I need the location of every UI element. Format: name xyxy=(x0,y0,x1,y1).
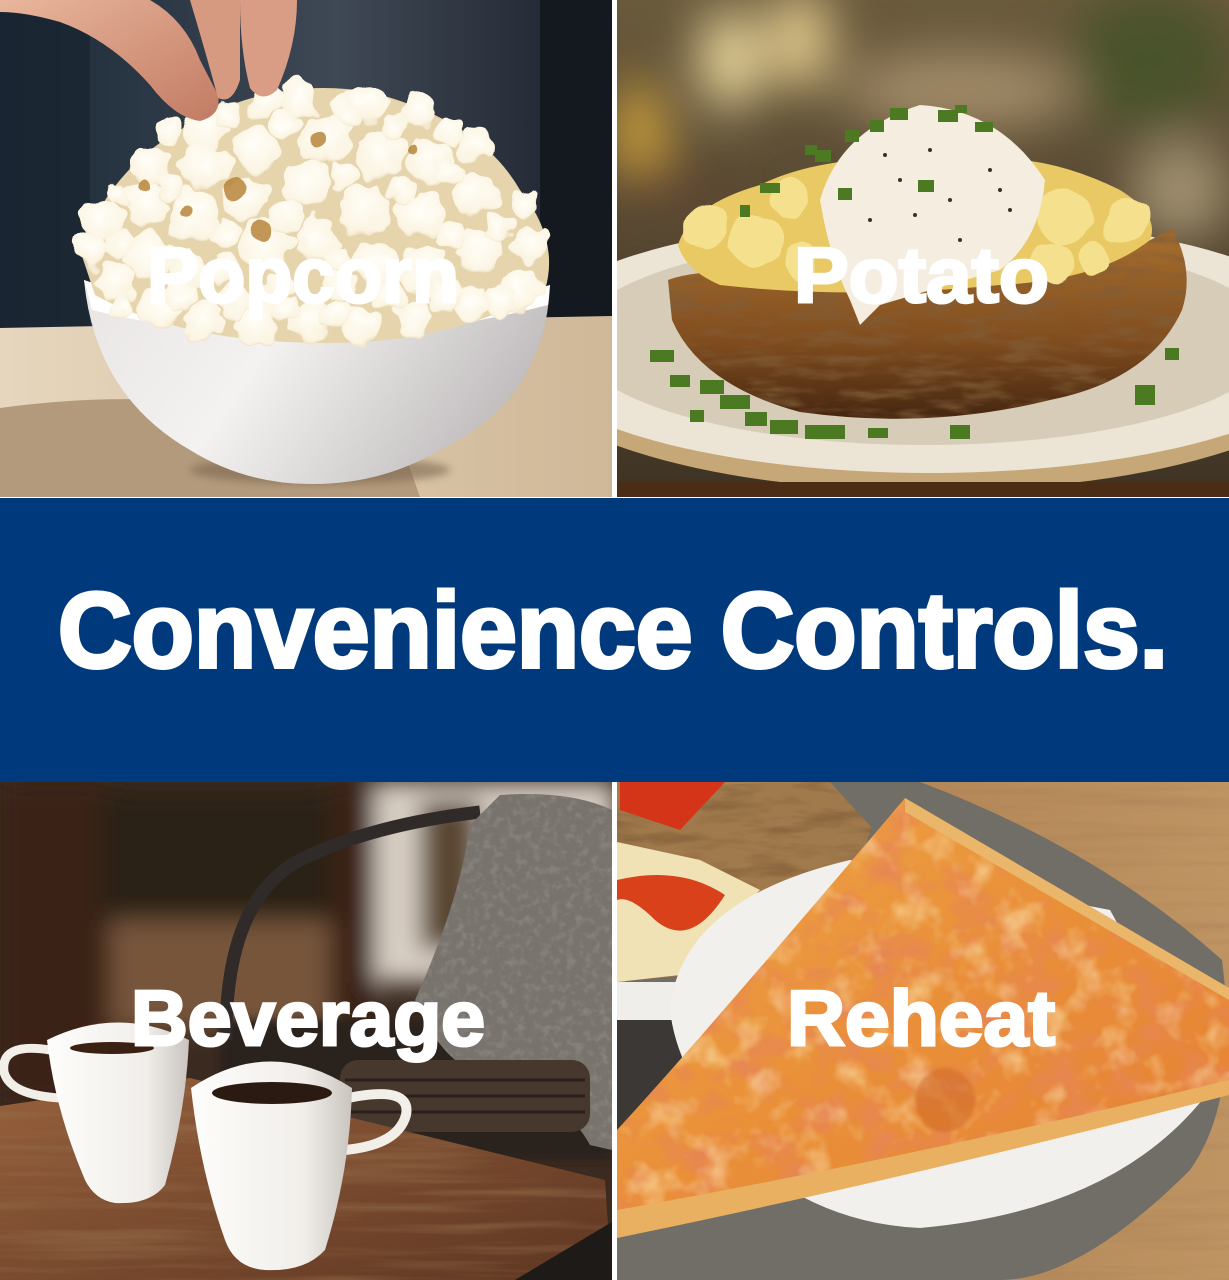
icon: right mug xyxy=(191,1062,407,1270)
panel: baked potato photo xyxy=(617,0,1229,497)
label: Popcorn: Popcorn xyxy=(147,231,459,319)
icon: chair frame xyxy=(226,812,480,1040)
icon: chives xyxy=(650,105,1179,439)
icon: back pizza slice xyxy=(617,782,872,1020)
panel: popcorn photo xyxy=(0,0,612,497)
icon: wicker seat xyxy=(340,1060,590,1132)
icon: plate xyxy=(617,236,1229,497)
icon: wooden table xyxy=(0,1078,612,1280)
icon: left mug xyxy=(4,1022,189,1203)
icon: popcorn pile xyxy=(75,80,550,344)
panel: beverage photo xyxy=(0,782,615,1280)
icon: metal tray xyxy=(617,782,1227,1280)
title: Convenience Controls. xyxy=(58,570,1168,690)
icon: pizza slice xyxy=(617,798,1229,1238)
label: Reheat: Reheat xyxy=(787,974,1055,1062)
label: Potato: Potato xyxy=(794,231,1049,319)
label: Beverage: Beverage xyxy=(131,974,485,1062)
icon: paper plate xyxy=(670,860,1210,1228)
title banner xyxy=(0,498,1229,782)
icon: hand reaching xyxy=(0,0,297,121)
panel: pizza photo xyxy=(617,782,1229,1280)
icon: potato xyxy=(668,105,1187,419)
icon: grey blanket xyxy=(415,794,612,1150)
icon: white bowl xyxy=(84,280,550,484)
